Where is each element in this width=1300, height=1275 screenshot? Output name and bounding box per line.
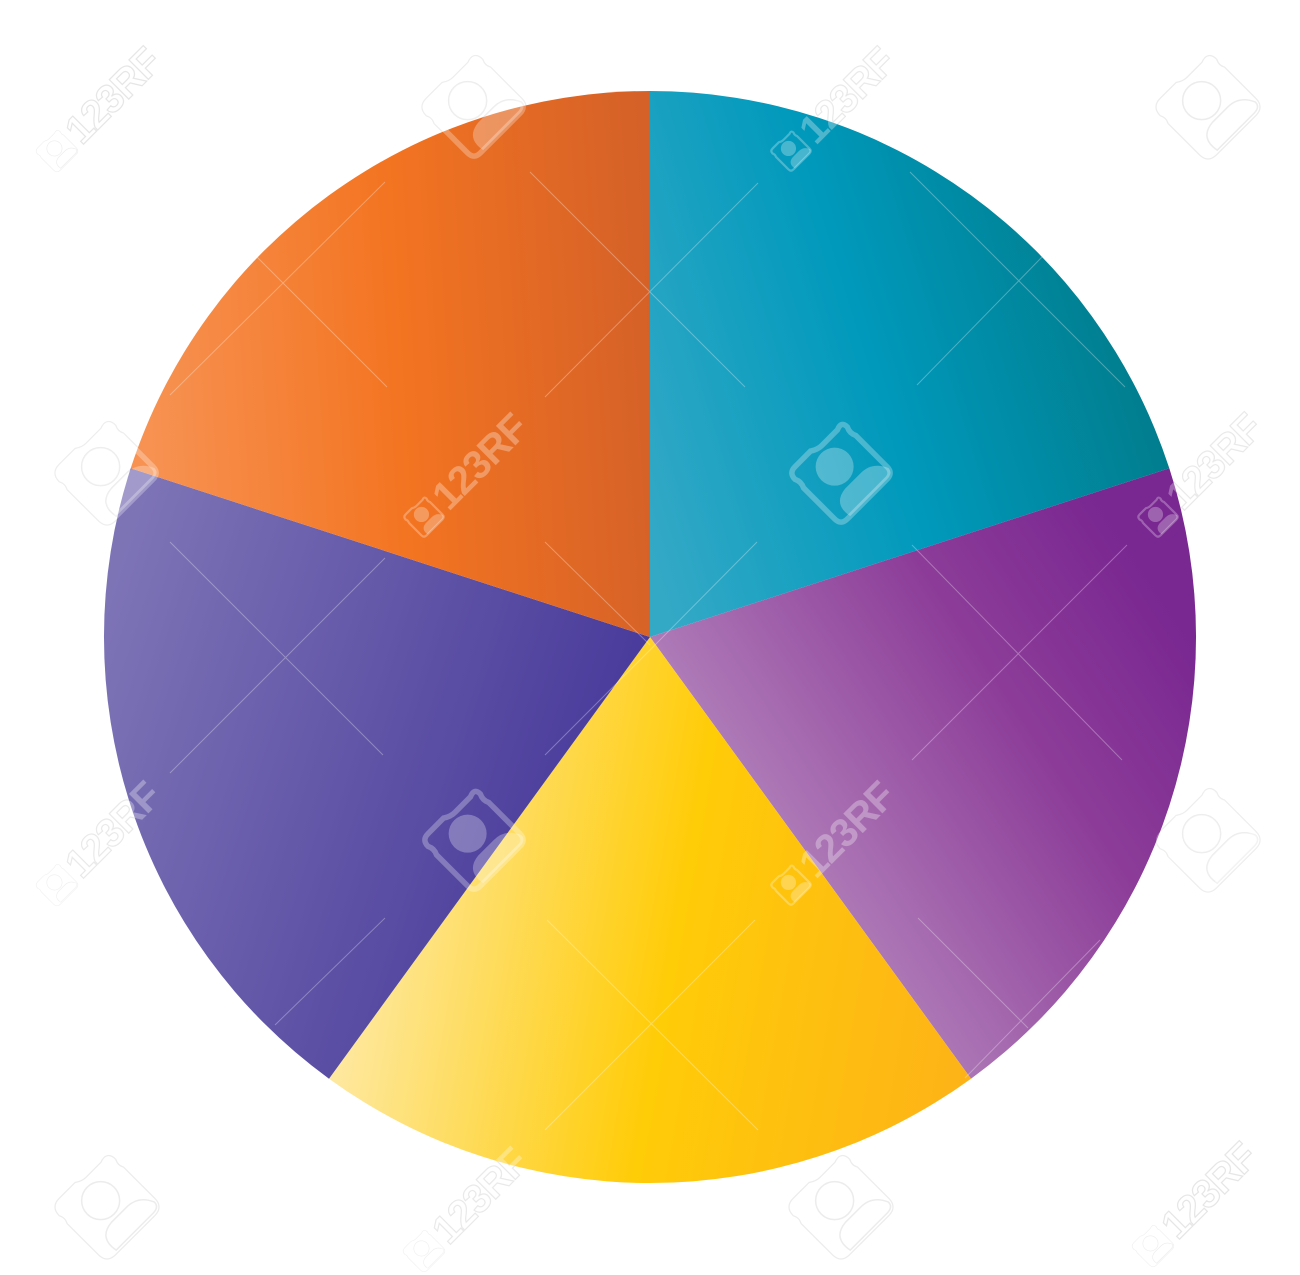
123RF stamp: top centre right overlay <box>766 40 903 178</box>
123RF stamp: lower left overlay: 123RF <box>57 774 169 886</box>
123RF stamp: lower left overlay <box>32 774 169 912</box>
camera stamp: top right <box>1156 55 1260 159</box>
123RF stamp: top left <box>32 40 169 178</box>
pie chart <box>104 91 1196 1183</box>
123RF stamp: bottom right <box>1128 1135 1265 1273</box>
camera stamp: top centre <box>422 55 526 159</box>
123RF stamp: top left: 123RF <box>57 40 169 152</box>
123RF stamp: bottom centre overlay <box>399 1140 536 1275</box>
camera stamp: top centre overlay <box>422 55 526 159</box>
123RF stamp: top centre right: 123RF <box>791 40 903 152</box>
slice: purple <box>650 468 1196 1079</box>
123RF stamp: lower left <box>32 774 169 912</box>
slice: teal <box>650 91 1169 637</box>
123RF stamp: lower centre right <box>766 774 903 912</box>
slice: indigo <box>104 468 650 1079</box>
123RF stamp: bottom centre overlay: 123RF <box>424 1140 536 1252</box>
camera stamp: bottom left <box>55 1155 159 1259</box>
camera stamp: lower centre <box>422 788 526 892</box>
123RF stamp: centre <box>399 406 536 544</box>
slice: yellow <box>329 637 971 1183</box>
camera stamp: lower right <box>1156 788 1260 892</box>
123RF stamp: bottom right: 123RF <box>1153 1135 1265 1247</box>
123RF stamp: bottom centre <box>399 1140 536 1275</box>
123RF stamp: centre: 123RF <box>424 406 536 518</box>
slice: orange <box>131 91 650 637</box>
camera stamp: lower right overlay <box>1156 788 1260 892</box>
123RF stamp: right <box>1133 406 1270 544</box>
123RF stamp: right overlay <box>1133 406 1270 544</box>
123RF stamp: bottom centre: 123RF <box>424 1140 536 1252</box>
123RF stamp: lower centre right: 123RF <box>791 774 903 886</box>
watermark cross lines <box>170 172 1127 1130</box>
camera stamp: bottom centre <box>789 1155 893 1259</box>
123RF stamp: right overlay: 123RF <box>1158 406 1270 518</box>
camera stamp: centre right <box>789 421 893 525</box>
camera stamp: middle left <box>55 421 159 525</box>
123RF stamp: top centre right <box>766 40 903 178</box>
123RF stamp: top centre right overlay: 123RF <box>791 40 903 152</box>
camera stamp: middle left overlay <box>55 421 159 525</box>
123RF stamp: lower left: 123RF <box>57 774 169 886</box>
123RF stamp: right: 123RF <box>1158 406 1270 518</box>
